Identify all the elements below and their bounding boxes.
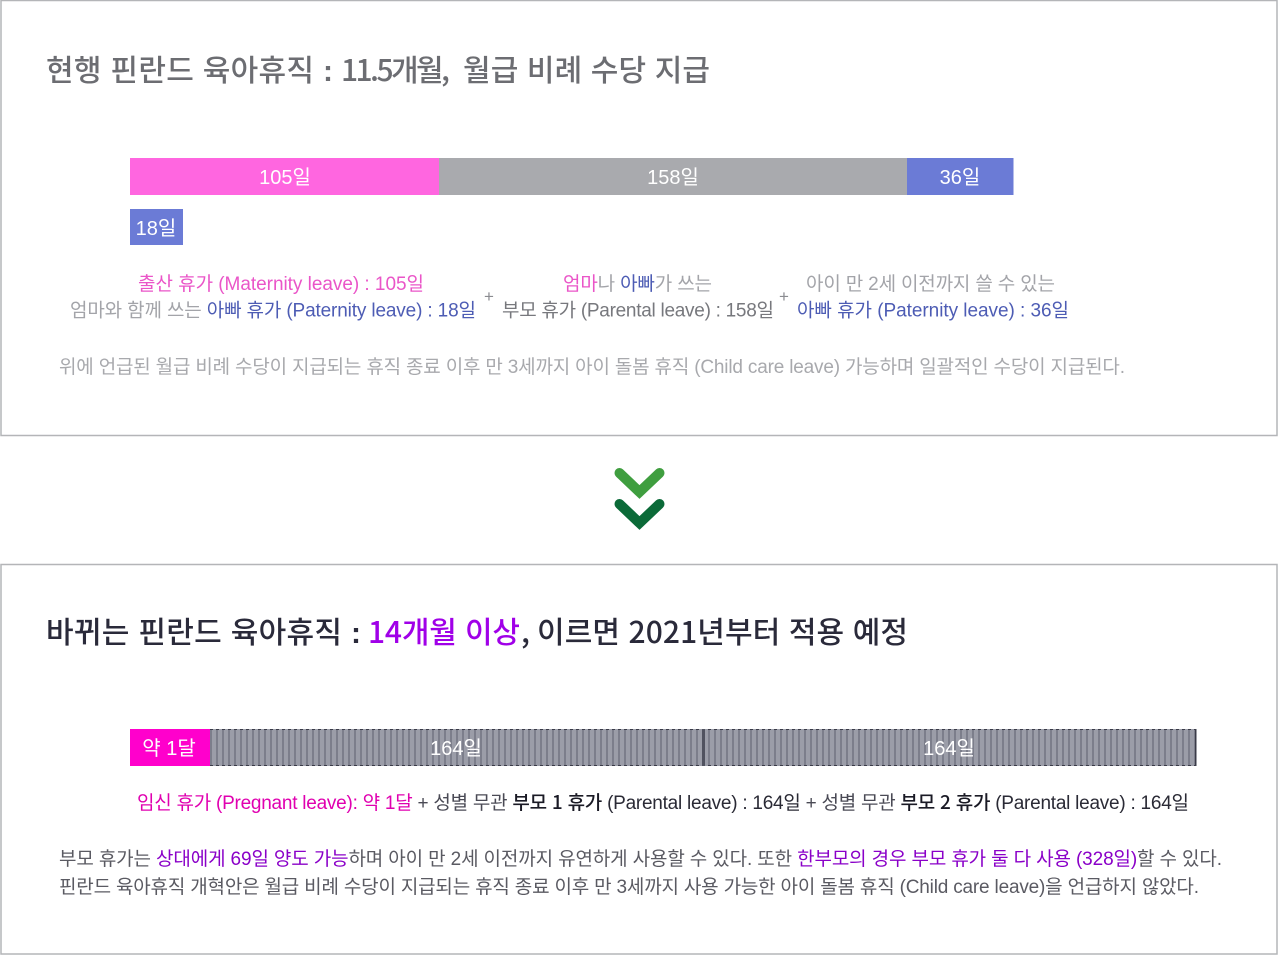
title: changed Finnish parental leave: 14개월 이상 [368,608,520,652]
icon: double down arrow [620,473,660,523]
text block: paternity leave before age 2 [797,273,1069,322]
title: changed Finnish parental leave: , [521,608,530,652]
text block: parental leave [502,273,774,322]
title: current Finnish parental leave: 현행 핀란드 육아휴직 [46,46,314,90]
bar chart: current leave days [130,158,1014,245]
text block: parental leave: 부모 휴가 (Parental leave) : 158일 [502,300,774,322]
bar chart: current leave days: 18일 [136,217,176,240]
bar chart: current leave days: 105일 [259,166,311,189]
bar chart: changed leave days [130,729,1196,766]
title: current Finnish parental leave: : [323,55,333,88]
panel: changed leave [1,564,1277,954]
text block: maternity and paternity leave: 엄마와 함께 쓰는 아빠 휴가 (Paternity leave) : 18일 [70,300,476,322]
title: current Finnish parental leave: 11.5개월, [341,46,450,90]
note: child care leave: 위에 언급된 월급 비례 수당이 지급되는 휴직 종료 이후 만 3세까지 아이 돌봄 휴직 (Child care leave) 가능하며 일괄적인 수당이 지급된다. [59,356,1125,378]
text block: maternity and paternity leave: 출산 휴가 (Maternity leave) : 105일 [138,273,424,295]
title: current Finnish parental leave: 월급 비례 수당 지급 [463,46,710,90]
bar chart: changed leave days: 164일 [923,737,975,760]
plus sign: + [484,287,494,306]
title: changed Finnish parental leave: 이르면 2021년부터 적용 예정 [537,608,908,652]
title: changed Finnish parental leave: 바뀌는 핀란드 육아휴직 [46,608,342,652]
bar chart: current leave days: 158일 [647,166,699,189]
panel: current leave [1,0,1277,436]
text block: paternity leave before age 2: 아빠 휴가 (Paternity leave) : 36일 [797,300,1069,322]
text block: paternity leave before age 2: 아이 만 2세 이전까지 쓸 수 있는 [806,273,1055,295]
bar chart: changed leave days: 164일 [430,737,482,760]
bar chart: changed leave days: 약 1달 [142,737,196,760]
title: changed Finnish parental leave [46,608,908,652]
text block: maternity and paternity leave [70,273,476,322]
plus sign: + [779,287,789,306]
bar chart: current leave days: 36일 [940,166,980,189]
note: child care leave not mentioned: 핀란드 육아휴직 개혁안은 월급 비례 수당이 지급되는 휴직 종료 이후 만 3세까지 사용 가능한 아이 돌봄 휴직 (Child care leave)을 언급하지 않았다. [59,876,1199,898]
text block: parental leave: 엄마나 아빠가 쓰는 [563,273,712,295]
title: current Finnish parental leave [46,46,710,90]
note: transfer and single parent rules: 부모 휴가는 상대에게 69일 양도 가능하며 아이 만 2세 이전까지 유연하게 사용할 수 있다. 또한 한부모의 경우 부모 휴가 둘 다 사용 (328일)할 수 있다. [59,848,1222,870]
text block: new leave formula: 임신 휴가 (Pregnant leave): 약 1달 + 성별 무관 부모 1 휴가 (Parental leave) : 164일 + 성별 무관 부모 2 휴가 (Parental leave) : 164일 [137,788,1189,815]
title: changed Finnish parental leave: : [351,617,361,650]
